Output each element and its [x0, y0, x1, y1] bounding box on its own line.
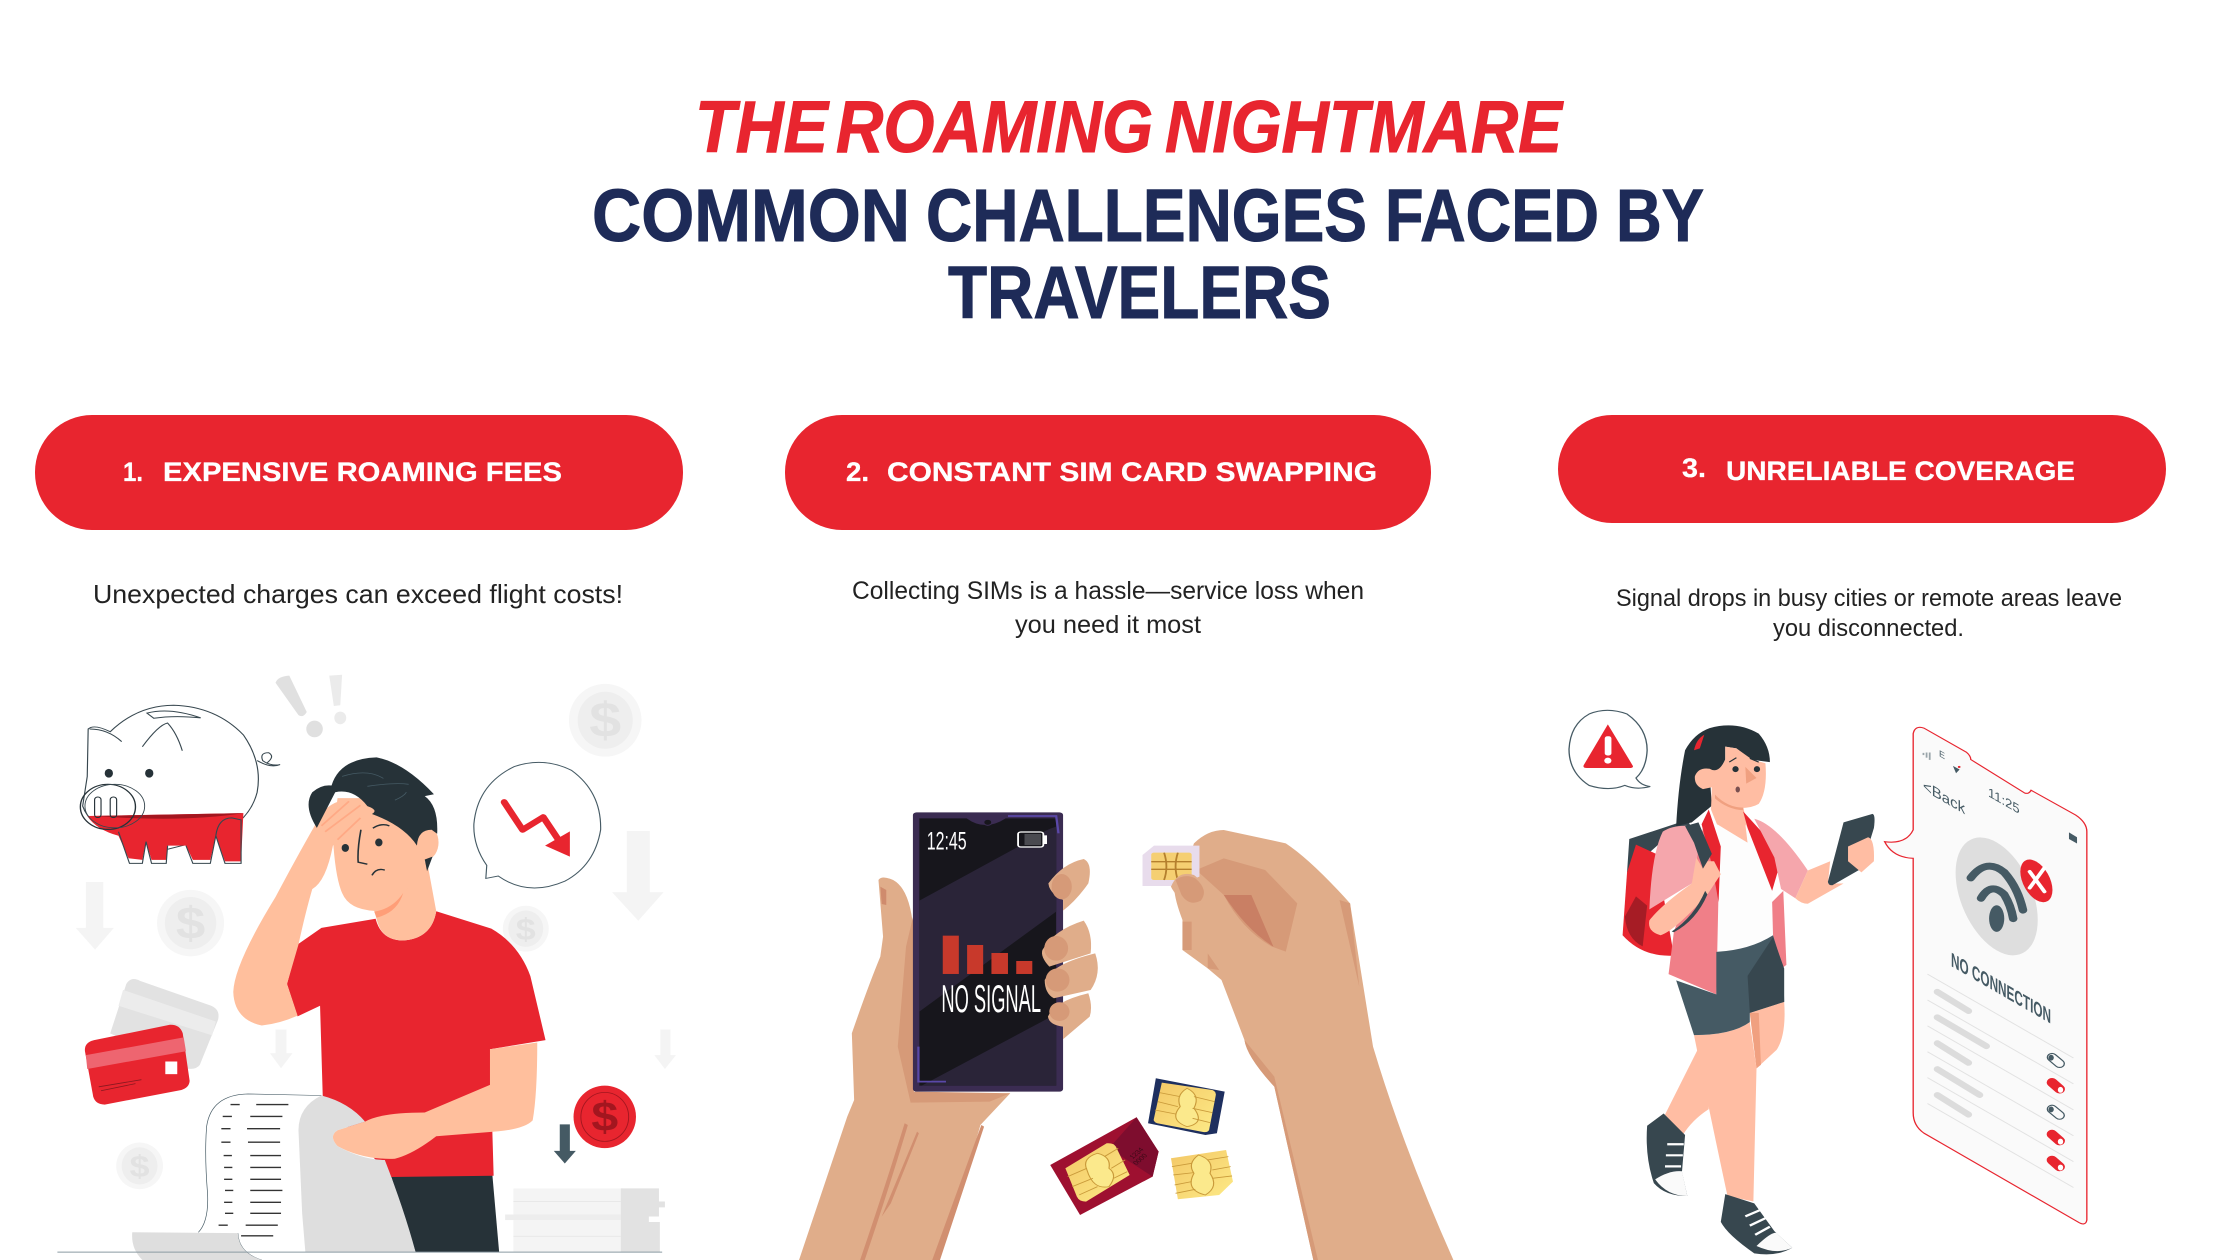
receipt — [132, 1094, 416, 1260]
panel 3 description: you disconnected. — [1773, 615, 1964, 642]
toggles — [2048, 1055, 2063, 1170]
red sim card: 1234 — [1128, 1147, 1146, 1160]
sim card held in fingers — [1143, 846, 1205, 907]
red sim card — [1050, 1117, 1159, 1215]
illustration 3: woman with no-connection screen — [1569, 710, 2087, 1254]
panel 1 header: expensive roaming fees: EXPENSIVE ROAMING FEES — [163, 457, 562, 487]
backpack — [1623, 820, 1692, 956]
panel 1 description: Unexpected charges can exceed flight costs! — [93, 579, 623, 609]
panel 2 header: constant sim card swapping: 2. — [846, 457, 869, 487]
title: the roaming nightmare: THE — [695, 87, 830, 168]
heading line 1: FACED — [1385, 174, 1599, 257]
icon: red dollar coin: $ — [591, 1093, 618, 1140]
man: red t-shirt — [287, 911, 546, 1177]
heading line 1 — [592, 174, 1704, 257]
no connection label: NO CONNECTION — [1951, 947, 2051, 1028]
arm and hand with phone — [1795, 861, 1844, 904]
arm holding strap — [1649, 858, 1721, 935]
title block — [592, 87, 1704, 334]
shorts — [1676, 935, 1784, 1035]
man: hair — [309, 757, 437, 871]
hair — [1676, 725, 1770, 826]
man: raised arm — [233, 800, 360, 1026]
left hand — [799, 877, 1010, 1260]
woman figure — [1623, 725, 1875, 1254]
icon: piggy bank — [80, 705, 280, 863]
man: lower arm and hand — [333, 1043, 537, 1159]
list rows — [1927, 974, 2073, 1188]
white tee — [1716, 824, 1773, 952]
title: the roaming nightmare — [695, 87, 1564, 168]
heading line 2: TRAVELERS — [948, 251, 1331, 334]
front leg — [1694, 1022, 1757, 1202]
man: neck and head — [321, 798, 439, 941]
title: the roaming nightmare: NIGHTMARE — [1165, 87, 1564, 168]
screen status and time text — [1923, 749, 2020, 818]
navy sim card — [1148, 1078, 1225, 1135]
alert speech bubble — [1569, 710, 1650, 789]
battery icon — [1018, 832, 1047, 847]
faded coins: $ — [130, 1150, 150, 1184]
panel 3 header: unreliable coverage: 3. — [1682, 453, 1706, 483]
panel 3 header: unreliable coverage: UNRELIABLE COVERAGE — [1726, 456, 2075, 486]
jacket — [1649, 809, 1808, 994]
phone screen panel — [1885, 727, 2087, 1224]
panel 3 description — [1616, 585, 2122, 642]
illustration 2: hands, phone and sim cards: NO SIGNAL — [941, 977, 1041, 1020]
faded coins — [116, 684, 642, 1189]
back leg — [1665, 1048, 1710, 1135]
panel 2 description — [852, 577, 1364, 639]
panel 2 header: constant sim card swapping — [785, 415, 1431, 530]
heading line 1: CHALLENGES — [926, 174, 1367, 257]
faded down arrows — [76, 831, 676, 1069]
icon: red credit card — [85, 1025, 190, 1105]
fingers on phone — [1042, 859, 1098, 1039]
heading line 1: COMMON — [592, 174, 910, 257]
panel 3 header: unreliable coverage — [1558, 415, 2166, 523]
heading line 1: BY — [1616, 174, 1704, 257]
icon: dark down arrow — [554, 1124, 576, 1164]
faded coins: $ — [516, 913, 536, 947]
neck — [1711, 787, 1748, 843]
panel 1 header: expensive roaming fees — [35, 415, 683, 530]
panel 2 header: constant sim card swapping: CONSTANT SIM CARD SWAPPING — [887, 457, 1377, 487]
smartphone — [913, 812, 1063, 1092]
screen status and time text: 11:25 — [1988, 784, 2020, 817]
panel 1 header: expensive roaming fees: 1. — [123, 457, 143, 487]
red sim card: 0000 — [1132, 1153, 1150, 1166]
screen status and time text: <Back — [1923, 777, 1966, 818]
panel 3 description: Signal drops in busy cities or remote areas leave — [1616, 585, 2122, 612]
icon: gray credit card — [110, 979, 219, 1069]
screen status and time text: E — [1939, 749, 1945, 763]
icon: exclamation marks — [276, 675, 346, 737]
illustration 1: worried man with receipt — [57, 675, 676, 1260]
faded coins: $ — [589, 694, 621, 748]
faded coins: $ — [176, 898, 205, 949]
smartphone: 12:45 — [927, 827, 967, 855]
face — [1695, 747, 1766, 810]
status bar icons — [1923, 753, 2077, 843]
sneakers — [1647, 1114, 1792, 1254]
panel 2 description: you need it most — [1015, 611, 1201, 639]
man: trousers — [390, 1174, 499, 1252]
title: the roaming nightmare: ROAMING — [836, 87, 1153, 168]
stack of papers — [505, 1188, 665, 1252]
illustration 2: hands, phone and sim cards — [799, 812, 1453, 1260]
signal bars — [943, 936, 1032, 974]
no-wifi icon — [1956, 819, 2052, 974]
panel 2 description: Collecting SIMs is a hassle—service loss when — [852, 577, 1364, 605]
speech bubble with falling arrow — [474, 762, 601, 888]
icon: red dollar coin — [574, 1086, 636, 1148]
right hand — [1174, 830, 1453, 1260]
loose sim chip — [1171, 1150, 1233, 1199]
